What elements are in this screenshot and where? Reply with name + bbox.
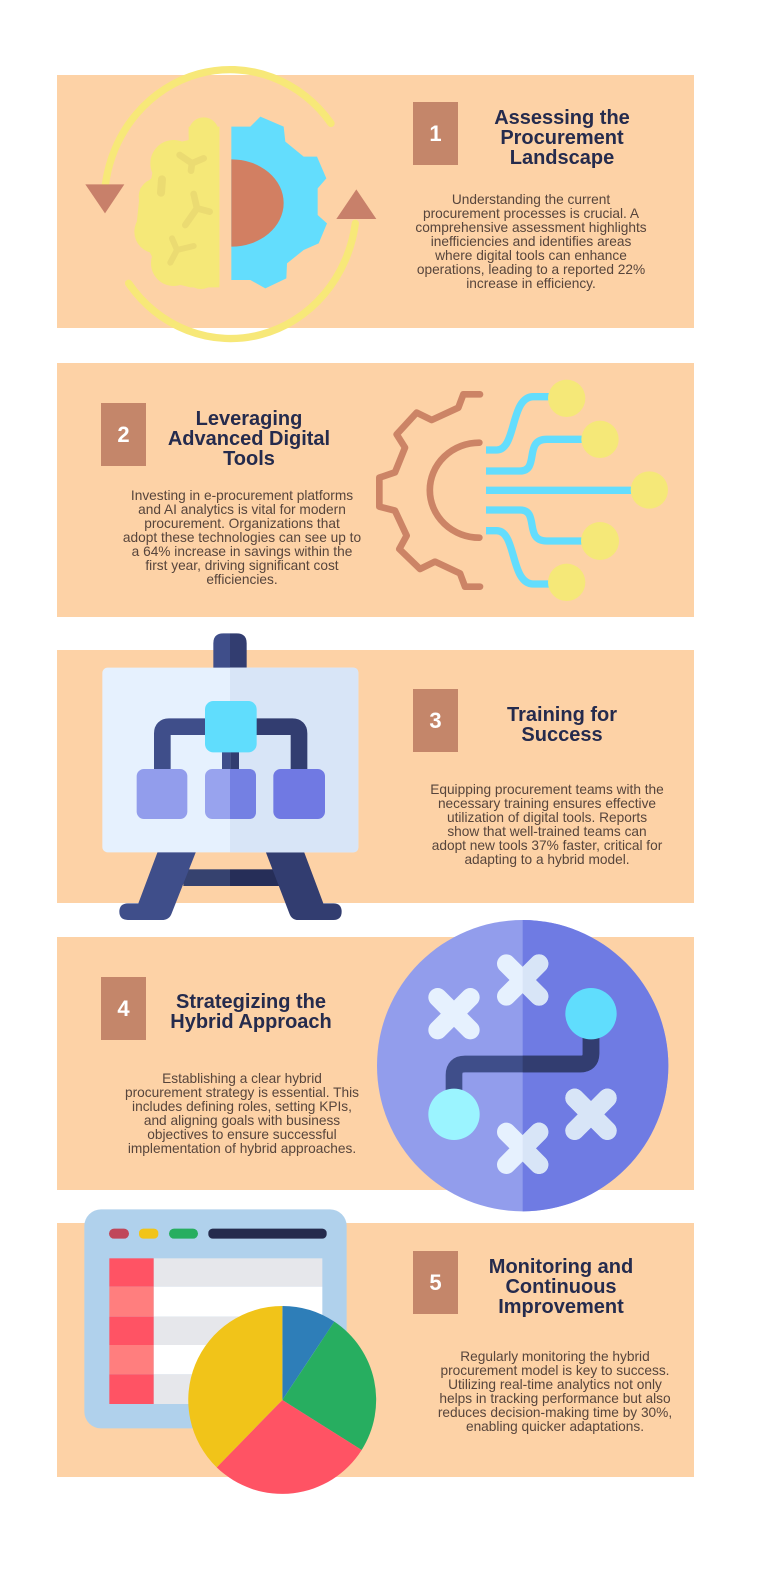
text block 1: operations, leading to a reported 22% bbox=[417, 262, 645, 277]
text block 1: procurement processes is crucial. A bbox=[423, 206, 639, 221]
icon: half gear with circuit lines bbox=[376, 380, 668, 601]
number badge 1: 1 bbox=[429, 121, 442, 146]
text block 4: implementation of hybrid approaches. bbox=[128, 1141, 356, 1156]
panel 2: leveraging advanced digital tools bbox=[57, 363, 694, 617]
text block 3: adopt new tools 37% faster, critical for bbox=[432, 838, 662, 853]
heading 5: Improvement bbox=[498, 1296, 624, 1318]
heading 4: Strategizing the bbox=[176, 991, 326, 1013]
icon: dashboard window with pie chart bbox=[84, 1209, 376, 1494]
heading 2 bbox=[168, 408, 330, 470]
panel 5: monitoring and continuous improvement bbox=[57, 1223, 694, 1477]
text block 5: Utilizing real-time analytics not only bbox=[448, 1377, 662, 1392]
icon: brain and gear with cycle arrows bbox=[86, 66, 376, 342]
text block 5 bbox=[438, 1349, 672, 1434]
heading 3: Training for bbox=[507, 704, 617, 726]
heading 5 bbox=[489, 1256, 633, 1318]
panel 4: strategizing the hybrid approach bbox=[57, 937, 694, 1190]
text block 5: procurement model is key to success. bbox=[440, 1363, 669, 1378]
heading 3 bbox=[507, 704, 617, 746]
text block 2: and AI analytics is vital for modern bbox=[138, 502, 346, 517]
heading 1 bbox=[494, 107, 630, 169]
text block 1: increase in efficiency. bbox=[466, 276, 596, 291]
text block 1: Understanding the current bbox=[452, 192, 610, 207]
panel 1: assessing the procurement landscape bbox=[57, 75, 694, 328]
text block 4: procurement strategy is essential. This bbox=[125, 1085, 359, 1100]
text block 3: show that well-trained teams can bbox=[447, 824, 647, 839]
number badge 3: 3 bbox=[429, 708, 442, 733]
heading 2: Tools bbox=[223, 448, 275, 470]
text block 1: inefficiencies and identifies areas bbox=[431, 234, 631, 249]
heading 1: Procurement bbox=[500, 127, 624, 149]
text block 3: utilization of digital tools. Reports bbox=[447, 810, 647, 825]
icon: strategy circle with path and crosses bbox=[377, 920, 668, 1212]
text block 1 bbox=[415, 192, 647, 291]
heading 1: Landscape bbox=[510, 147, 614, 169]
text block 2: Investing in e-procurement platforms bbox=[131, 488, 353, 503]
text block 1: comprehensive assessment highlights bbox=[415, 220, 647, 235]
heading 1: Assessing the bbox=[494, 107, 630, 129]
text block 4: and aligning goals with business bbox=[144, 1113, 340, 1128]
text block 3 bbox=[430, 782, 664, 867]
text block 5: helps in tracking performance but also bbox=[439, 1391, 671, 1406]
text block 4: includes defining roles, setting KPIs, bbox=[132, 1099, 352, 1114]
number badge 5: 5 bbox=[429, 1270, 442, 1295]
heading 4: Hybrid Approach bbox=[170, 1011, 332, 1033]
heading 5: Monitoring and bbox=[489, 1256, 633, 1278]
number badge 1 bbox=[413, 102, 458, 165]
text block 3: Equipping procurement teams with the bbox=[430, 782, 664, 797]
panel 3: training for success bbox=[57, 650, 694, 903]
text block 2: a 64% increase in savings within the bbox=[132, 544, 352, 559]
heading 2: Leveraging bbox=[196, 408, 302, 430]
text block 2: first year, driving significant cost bbox=[145, 558, 339, 573]
text block 4 bbox=[125, 1071, 359, 1156]
number badge 5 bbox=[413, 1251, 458, 1314]
text block 2: adopt these technologies can see up to bbox=[123, 530, 361, 545]
number badge 3 bbox=[413, 689, 458, 752]
heading 5: Continuous bbox=[505, 1276, 617, 1298]
text block 3: necessary training ensures effective bbox=[438, 796, 656, 811]
text block 2: procurement. Organizations that bbox=[144, 516, 340, 531]
number badge 4: 4 bbox=[117, 996, 130, 1021]
heading 2: Advanced Digital bbox=[168, 428, 330, 450]
heading 4 bbox=[170, 991, 332, 1033]
text block 1: where digital tools can enhance bbox=[435, 248, 627, 263]
text block 2: efficiencies. bbox=[206, 572, 278, 587]
text block 2 bbox=[123, 488, 361, 587]
heading 3: Success bbox=[521, 724, 603, 746]
number badge 2 bbox=[101, 403, 146, 466]
text block 5: reduces decision-making time by 30%, bbox=[438, 1405, 672, 1420]
text block 5: Regularly monitoring the hybrid bbox=[460, 1349, 650, 1364]
text block 4: Establishing a clear hybrid bbox=[162, 1071, 322, 1086]
text block 3: adapting to a hybrid model. bbox=[464, 852, 630, 867]
text block 5: enabling quicker adaptations. bbox=[466, 1419, 644, 1434]
icon: presentation board with org chart bbox=[102, 633, 358, 920]
number badge 4 bbox=[101, 977, 146, 1040]
number badge 2: 2 bbox=[117, 422, 130, 447]
text block 4: objectives to ensure successful bbox=[147, 1127, 337, 1142]
